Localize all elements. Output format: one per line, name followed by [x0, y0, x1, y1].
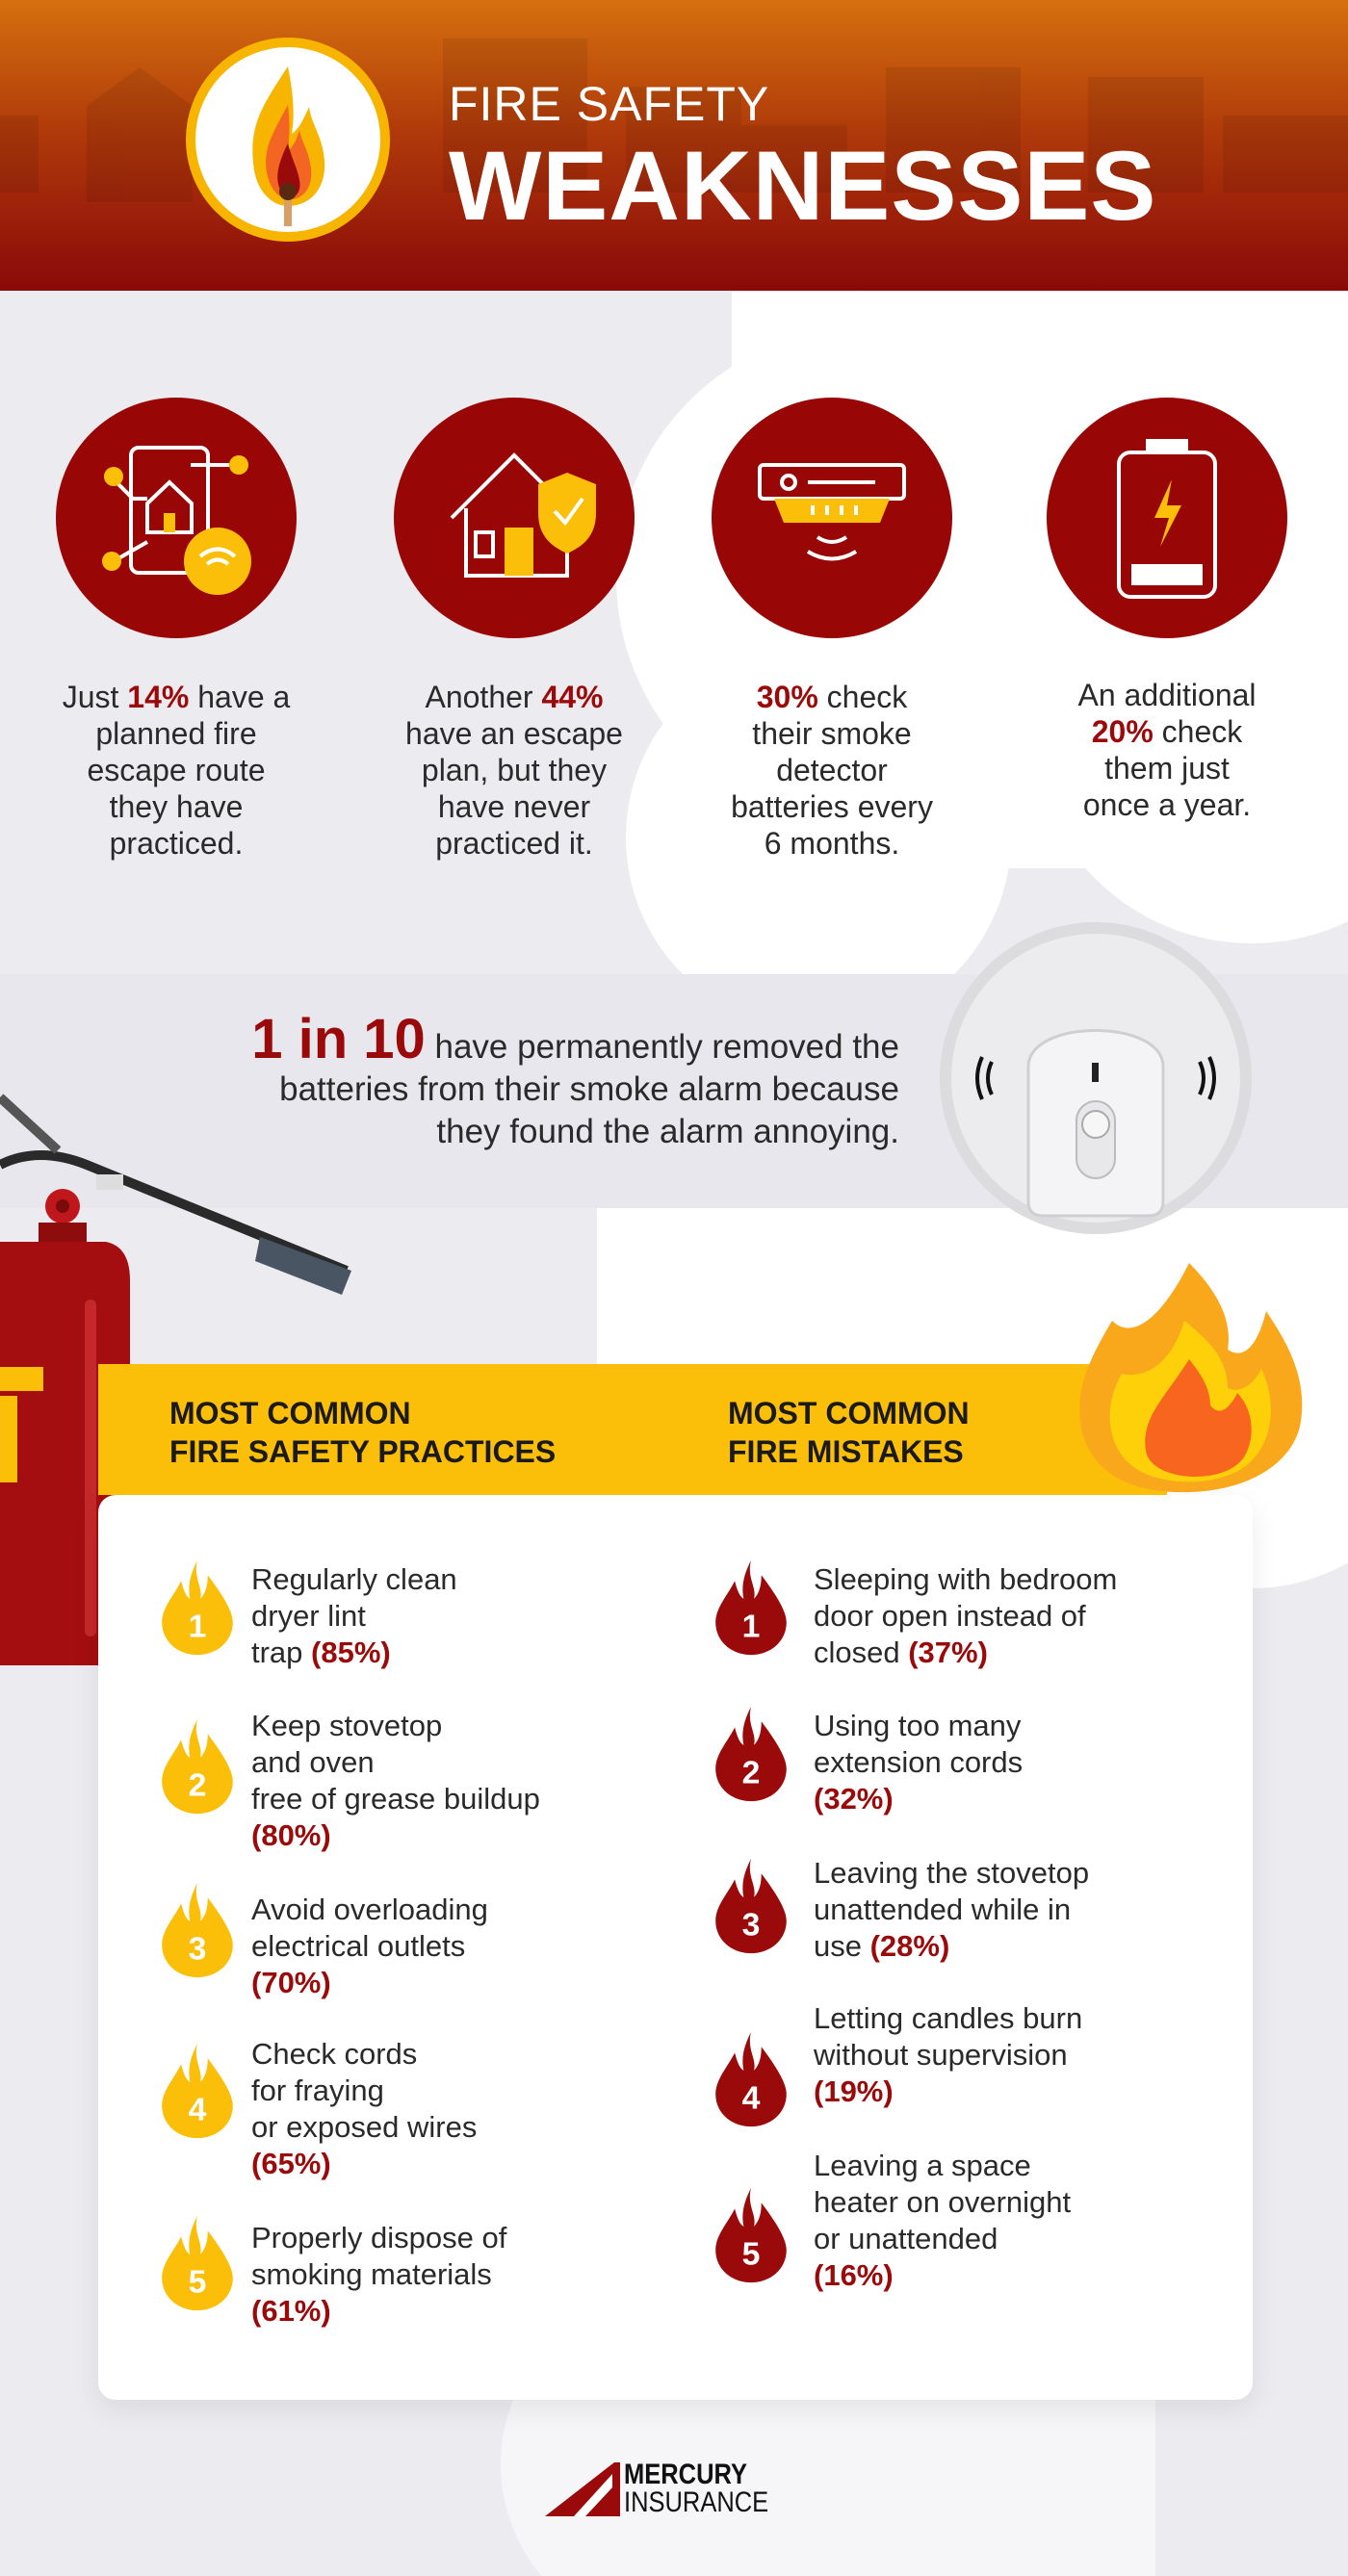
item: practice 4: Check cords [251, 2037, 417, 2071]
item: mistake 4: 4 [742, 2080, 761, 2117]
list: mistakes: closed (37%) [814, 1636, 988, 1669]
item: mistake 1 [715, 1560, 1117, 1669]
item: mistake 2: Using too many [814, 1709, 1021, 1742]
stat: 44%: Another 44% [425, 680, 603, 714]
item: practice 4: 4 [189, 2092, 207, 2128]
item: practice 3: 3 [189, 1931, 206, 1968]
item: mistake 1: 1 [742, 1609, 760, 1645]
stat: 20%: An additional [1077, 678, 1257, 712]
item: practice 2: and oven [251, 1745, 375, 1779]
stat: 30%: detector [776, 753, 888, 787]
panel: lists card [98, 1495, 1253, 2400]
item: mistake 5: (16%) [814, 2258, 894, 2292]
item: mistake 3: use (28%) [814, 1929, 949, 1963]
item: practice 2: 2 [189, 1767, 206, 1804]
item: practice 1 [162, 1560, 457, 1669]
item: mistake 3 [715, 1856, 1089, 1963]
stat: 14%: they have [110, 789, 243, 824]
stat: 20%: once a year. [1083, 787, 1251, 822]
list: practices: trap (85%) [251, 1636, 391, 1669]
stat: 44% [405, 680, 623, 861]
list: practices [162, 1560, 540, 2328]
item: mistake 5: 5 [742, 2236, 760, 2273]
stat: 20%: them just [1104, 751, 1230, 786]
stat: 30%: their smoke [752, 716, 912, 751]
list: mistakes [715, 1560, 1117, 2292]
item: practice 3: (70%) [251, 1966, 331, 1999]
stat: 14%: practiced. [110, 826, 243, 861]
stat: 44%: have never [438, 789, 590, 824]
logo: Mercury Insurance: INSURANCE [624, 2486, 768, 2518]
stat: 30%: 6 months. [765, 826, 899, 861]
item: practice 2 [162, 1709, 540, 1852]
item: practice 1: 1 [189, 1609, 206, 1645]
item: mistake 5: heater on overnight [814, 2185, 1071, 2219]
callout: 1 in 10 [251, 1008, 899, 1150]
icon: smoke detector [712, 398, 952, 638]
callout: 1 in 10: batteries from their smoke alarm because [279, 1070, 899, 1108]
item: mistake 2: extension cords [814, 1745, 1023, 1779]
item: mistake 3: unattended while in [814, 1893, 1071, 1926]
heading: practices: FIRE SAFETY PRACTICES [169, 1434, 556, 1469]
stat: 44%: practiced it. [435, 826, 593, 861]
stat: 14%: Just 14% have a [63, 680, 290, 714]
icon: smoke alarm [940, 922, 1252, 1234]
item: practice 5 [162, 2216, 506, 2328]
icon: match flame logo [186, 38, 390, 242]
item: mistake 1: Sleeping with bedroom [814, 1562, 1117, 1596]
logo: Mercury Insurance: MERCURY [624, 2459, 747, 2490]
title: FIRE SAFETY [449, 77, 769, 131]
item: mistake 4 [715, 2001, 1082, 2127]
icon: escape route [56, 398, 297, 638]
heading: mistakes: MOST COMMON [728, 1396, 970, 1430]
item: mistake 1: door open instead of [814, 1599, 1086, 1633]
item: mistake 3: Leaving the stovetop [814, 1856, 1089, 1890]
logo: Mercury Insurance [545, 2459, 768, 2518]
item: practice 5: Properly dispose of [251, 2221, 506, 2254]
item: mistake 4: without supervision [814, 2038, 1068, 2072]
stat: 44%: have an escape [405, 716, 623, 751]
item: practice 4: (65%) [251, 2147, 331, 2180]
heading: mistakes: FIRE MISTAKES [728, 1434, 964, 1469]
heading: practices: MOST COMMON [169, 1396, 411, 1430]
item: practice 3: Avoid overloading [251, 1893, 488, 1926]
stat: 20% [1077, 678, 1257, 822]
stat: 30%: batteries every [731, 789, 933, 824]
item: practice 4: for fraying [251, 2074, 384, 2107]
heading: mistakes [728, 1396, 970, 1469]
icon: house shield [394, 398, 635, 638]
title [449, 77, 1156, 241]
item: practice 3: electrical outlets [251, 1929, 465, 1963]
item: mistake 5 [715, 2149, 1071, 2292]
item: practice 5: 5 [189, 2264, 206, 2301]
callout: 1 in 10: they found the alarm annoying. [436, 1113, 899, 1150]
heading: practices [169, 1396, 556, 1469]
item: mistake 4: (19%) [814, 2074, 894, 2108]
item: practice 2: free of grease buildup [251, 1782, 540, 1816]
item: practice 4 [162, 2037, 477, 2180]
stat: 44%: plan, but they [422, 753, 607, 787]
stat: 14% [63, 680, 291, 861]
item: practice 5: (61%) [251, 2294, 331, 2328]
icon: big flame [1079, 1263, 1302, 1492]
item: mistake 4: Letting candles burn [814, 2001, 1082, 2035]
header band [98, 1364, 1167, 1495]
item: practice 4: or exposed wires [251, 2110, 477, 2144]
item: practice 3 [162, 1883, 488, 1999]
stat: 14%: planned fire [95, 716, 257, 751]
item: practice 2: Keep stovetop [251, 1709, 442, 1742]
stat: 20%: 20% check [1092, 714, 1242, 749]
callout: 1 in 10: 1 in 10 have permanently removed the [251, 1008, 899, 1070]
item: mistake 2: 2 [742, 1755, 760, 1791]
title: WEAKNESSES [449, 131, 1156, 241]
stat: 30%: 30% check [757, 680, 907, 714]
item: mistake 3: 3 [742, 1907, 760, 1944]
item: mistake 5: or unattended [814, 2222, 998, 2255]
stat: 14%: escape route [87, 753, 266, 787]
header banner [0, 0, 1348, 291]
icon: battery [1047, 398, 1287, 638]
item: practice 1: dryer lint [251, 1599, 366, 1633]
item: mistake 5: Leaving a space [814, 2149, 1031, 2182]
icon: fire extinguisher [0, 1094, 351, 1665]
item: practice 2: (80%) [251, 1818, 331, 1852]
item: mistake 2: (32%) [814, 1782, 894, 1816]
stat: 30% [731, 680, 933, 861]
item: practice 5: smoking materials [251, 2257, 492, 2291]
item: practice 1: Regularly clean [251, 1562, 457, 1596]
item: mistake 2 [715, 1707, 1023, 1816]
